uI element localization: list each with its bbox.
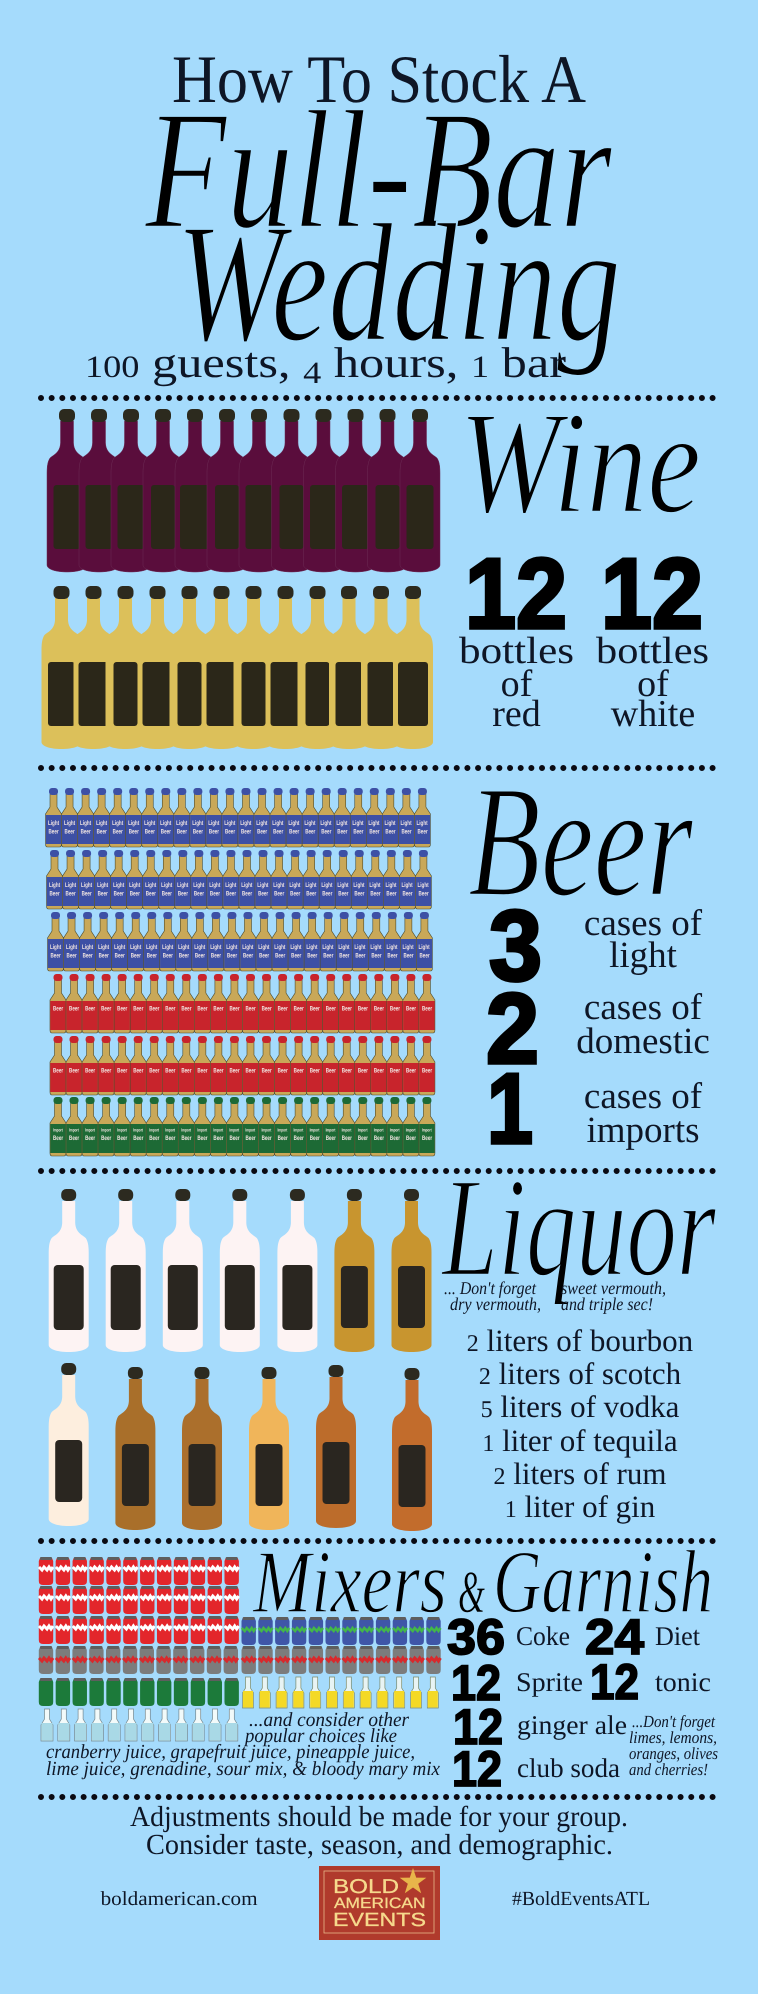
subtitle: 100 guests, (85, 340, 268, 387)
stat: coke: Coke (516, 1621, 570, 1651)
note: vermouth: sweet vermouth, (561, 1278, 666, 1298)
import beer bottles (50, 1097, 435, 1156)
stat: club soda: 12 (452, 1741, 502, 1797)
stat: red: red (492, 693, 541, 735)
stat: diet: 24 (585, 1609, 644, 1665)
stat: red: 12 (465, 538, 567, 650)
stat: diet: Diet (655, 1621, 700, 1651)
red wine bottles (47, 409, 440, 572)
note: other juices: lime juice, grenadine, sour mix, & bloody mary mix (46, 1758, 440, 1780)
note: garnish: and cherries! (629, 1760, 708, 1779)
ginger ale cans (39, 1678, 239, 1706)
liquor bottles: top row (49, 1189, 431, 1352)
liquor quantity list: 5 liters of vodka (481, 1389, 680, 1424)
title line: how to stock a: How To Stock A (172, 41, 586, 117)
light beer labels: Beer Beer Beer Beer Beer Beer Beer Beer Beer Beer Beer Beer Beer Beer Beer Beer Beer Beer Beer Beer Beer Beer Beer Beer (50, 890, 429, 898)
stat: sprite: 12 (451, 1655, 501, 1711)
light beer labels: Light Light Light Light Light Light Light Light Light Light Light Light Light Light Light Light Light Light Light Light Light Light Light Light (49, 882, 429, 889)
title line: wedding: Wedding (176, 189, 621, 377)
liquor quantity list: 2 liters of scotch (479, 1356, 682, 1391)
icon: star (400, 1868, 426, 1893)
stat: white: bottles (596, 630, 709, 672)
heading: mixers and garnish: & (458, 1559, 485, 1625)
note: other juices (46, 1709, 440, 1780)
stat: light: cases of (584, 903, 703, 944)
title line: full-bar: Full-Bar (144, 76, 613, 264)
sprite cans (39, 1646, 238, 1674)
domestic beer labels (53, 1006, 432, 1074)
footer note: Adjustments should be made for your group. (130, 1801, 628, 1833)
stat: domestic: domestic (576, 1021, 710, 1062)
panel: mixers and garnish (39, 1533, 718, 1797)
stat: sprite (451, 1655, 583, 1711)
note: other juices: ...and consider other (249, 1709, 409, 1731)
footer note: Consider taste, season, and demographic. (146, 1829, 613, 1861)
domestic beer labels: Beer Beer Beer Beer Beer Beer Beer Beer Beer Beer Beer Beer Beer Beer Beer Beer Beer Beer Beer Beer Beer Beer Beer Beer (53, 1068, 432, 1074)
import beer labels (53, 1128, 432, 1142)
light beer bottles (46, 788, 432, 971)
panel: liquor (49, 1148, 717, 1531)
light beer labels: Beer Beer Beer Beer Beer Beer Beer Beer Beer Beer Beer Beer Beer Beer Beer Beer Beer Beer Beer Beer Beer Beer Beer Beer (50, 952, 430, 960)
liquor quantity list: 2 liters of rum (494, 1456, 666, 1491)
white wine bottles (42, 586, 433, 749)
import beer labels: Import Import Import Import Import Import Import Import Import Import Import Import Import Import Import Import Import Import Import Import Import Import Import Import (53, 1128, 432, 1132)
liquor quantity list (467, 1323, 694, 1524)
domestic beer labels: Beer Beer Beer Beer Beer Beer Beer Beer Beer Beer Beer Beer Beer Beer Beer Beer Beer Beer Beer Beer Beer Beer Beer Beer (53, 1006, 432, 1012)
stat: domestic: cases of (584, 987, 703, 1028)
light beer labels (48, 820, 430, 960)
stat: red: of (501, 663, 533, 705)
light beer labels: Light Light Light Light Light Light Light Light Light Light Light Light Light Light Light Light Light Light Light Light Light Light Light Light (50, 944, 430, 951)
import beer labels: Beer Beer Beer Beer Beer Beer Beer Beer Beer Beer Beer Beer Beer Beer Beer Beer Beer Beer Beer Beer Beer Beer Beer Beer (53, 1135, 432, 1142)
domestic beer bottles (50, 974, 435, 1095)
stat: tonic (590, 1654, 711, 1710)
panel: wine (42, 381, 709, 749)
stat: light (489, 890, 703, 1002)
note: garnish: limes, lemons, (629, 1728, 717, 1747)
liquor quantity list: 1 liter of gin (505, 1489, 656, 1524)
heading: mixers and garnish (251, 1533, 713, 1632)
stat: imports: imports (586, 1110, 700, 1151)
stat: coke (447, 1609, 570, 1665)
stat: ginger ale: ginger ale (517, 1710, 627, 1740)
stat: diet (585, 1609, 700, 1665)
liquor quantity list: 1 liter of tequila (482, 1423, 678, 1458)
tonic bottles (242, 1677, 438, 1708)
liquor quantity list: 2 liters of bourbon (467, 1323, 694, 1358)
stat: club soda: club soda (517, 1753, 620, 1783)
stat: white (596, 538, 709, 735)
logo: bold american events: EVENTS (333, 1910, 426, 1931)
stat: domestic (486, 973, 710, 1085)
light beer labels: Light Light Light Light Light Light Light Light Light Light Light Light Light Light Light Light Light Light Light Light Light Light Light Light (48, 820, 428, 827)
stat: light: 3 (489, 890, 542, 1002)
note: vermouth: and triple sec! (561, 1294, 653, 1314)
subtitle: 1 bar (471, 340, 555, 387)
club soda bottles (41, 1709, 238, 1741)
footer note (130, 1801, 628, 1861)
stat: red: bottles (459, 630, 574, 672)
title (85, 41, 621, 390)
note: garnish (629, 1712, 718, 1779)
note: other juices: popular choices like (243, 1725, 397, 1747)
stat: domestic: 2 (486, 973, 539, 1085)
stat: club soda (452, 1741, 620, 1797)
stat: white: 12 (601, 538, 703, 650)
diet cans (242, 1617, 441, 1674)
stat: light: light (609, 935, 678, 976)
note: garnish: oranges, olives (629, 1744, 718, 1763)
stat: ginger ale: 12 (453, 1699, 503, 1755)
subtitle: hours, (321, 340, 471, 387)
stat: imports: cases of (584, 1076, 703, 1117)
logo: bold american events: AMERICAN (334, 1895, 426, 1912)
stat: tonic: tonic (655, 1667, 711, 1697)
light beer labels: Beer Beer Beer Beer Beer Beer Beer Beer Beer Beer Beer Beer Beer Beer Beer Beer Beer Beer Beer Beer Beer Beer Beer Beer (48, 828, 428, 836)
coke cans (39, 1557, 239, 1644)
note: other juices: cranberry juice, grapefruit juice, pineapple juice, (46, 1741, 415, 1763)
heading: mixers and garnish: Mixers (251, 1533, 447, 1632)
stat: tonic: 12 (590, 1654, 639, 1710)
stat: sprite: Sprite (516, 1667, 583, 1697)
stat: white: white (611, 693, 695, 735)
website: boldamerican.com (101, 1888, 258, 1910)
note: vermouth (444, 1278, 666, 1314)
heading: wine: Wine (459, 381, 701, 544)
subtitle: 4 (303, 355, 322, 390)
note: vermouth: dry vermouth, (450, 1294, 541, 1314)
liquor bottles: bottom row (49, 1363, 432, 1531)
stat: imports: 1 (487, 1053, 533, 1165)
stat: white: of (637, 663, 669, 705)
logo: bold american events (319, 1866, 440, 1940)
panel: beer (46, 752, 710, 1165)
note: garnish: ...Don't forget (632, 1712, 716, 1731)
stat: coke: 36 (447, 1609, 505, 1665)
note: vermouth: ... Don't forget (444, 1278, 537, 1298)
hashtag: #BoldEventsATL (512, 1888, 650, 1910)
stat: red (459, 538, 574, 735)
stat: imports (487, 1053, 703, 1165)
logo: bold american events: BOLD (333, 1876, 399, 1898)
stat: ginger ale (453, 1699, 627, 1755)
